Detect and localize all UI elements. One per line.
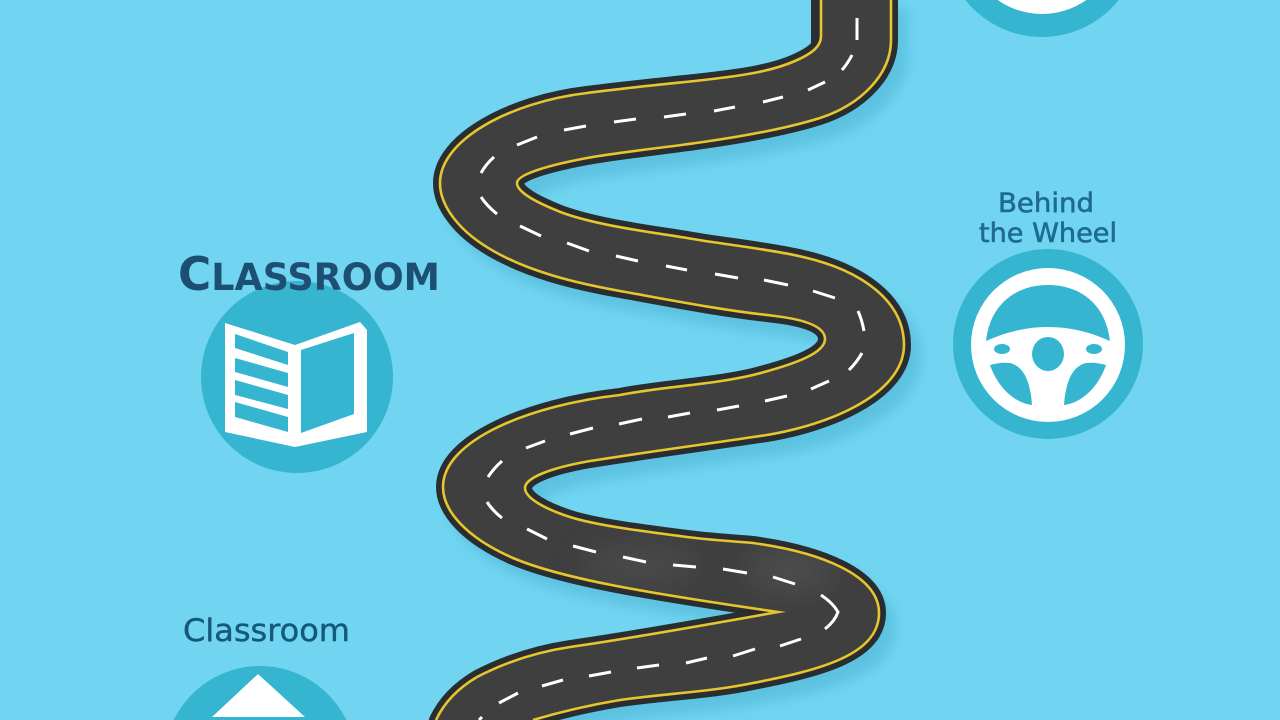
icon: steering wheel xyxy=(953,249,1143,439)
heading: Behind the Wheel: the Wheel xyxy=(979,218,1117,249)
wheel lower right opening xyxy=(1064,363,1106,405)
wheel right button xyxy=(1086,344,1102,354)
book white cover xyxy=(225,322,367,447)
road dark outer kerb at the top xyxy=(811,0,823,46)
heading: Behind the Wheel xyxy=(979,188,1117,249)
wheel hub xyxy=(1032,337,1064,371)
icon: cropped bottom circle with triangle xyxy=(174,666,346,720)
asphalt surface xyxy=(436,0,904,720)
white centre dashes xyxy=(479,18,864,720)
heading: Classroom small caps: CLASSROOM xyxy=(178,247,440,301)
top circle: cropped steering wheel xyxy=(965,0,1119,37)
winding road xyxy=(436,0,915,720)
asphalt lighter worn patches xyxy=(614,553,820,587)
heading: Behind the Wheel: Behind xyxy=(998,188,1094,219)
heading: Classroom lower: Classroom xyxy=(183,613,350,649)
infographic canvas xyxy=(174,0,1143,720)
road shadow xyxy=(447,14,915,720)
wheel upper opening xyxy=(986,285,1110,341)
icon: open book xyxy=(201,281,393,473)
wheel left button xyxy=(994,344,1010,354)
book left page lines xyxy=(235,334,288,432)
yellow edge lines xyxy=(436,0,904,720)
book right page xyxy=(301,333,354,433)
wheel lower left opening xyxy=(990,363,1032,405)
